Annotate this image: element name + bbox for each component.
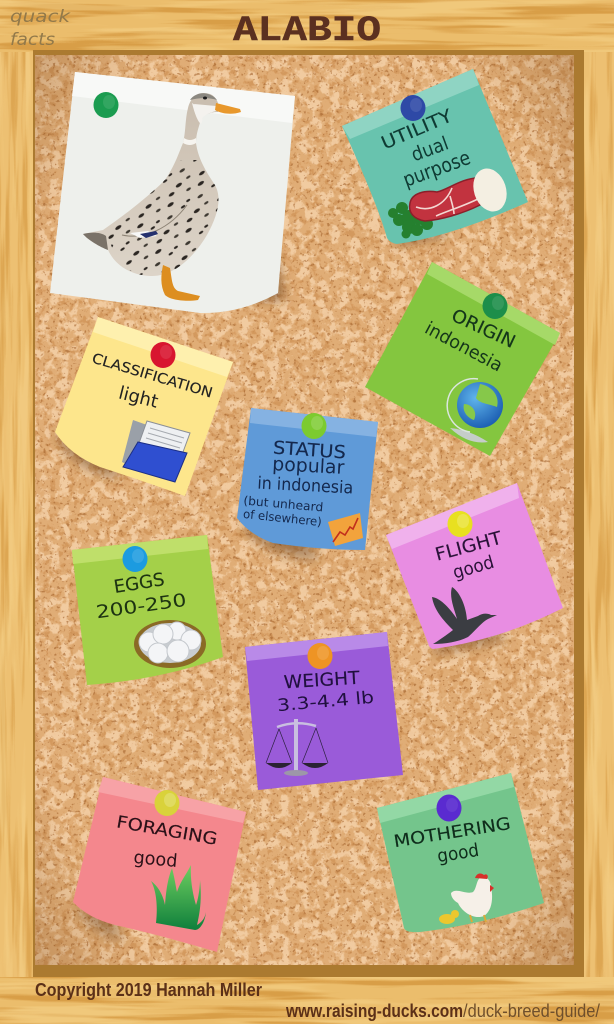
icon: hen and chick	[439, 873, 494, 924]
text: good: good	[436, 840, 481, 867]
text: flight: FLIGHT	[433, 527, 505, 566]
icon: meat, egg and parsley	[388, 164, 512, 238]
panel: eggs note	[72, 535, 223, 685]
panel: status note	[237, 408, 378, 560]
icon: globe	[447, 379, 503, 442]
pin: orange	[308, 643, 332, 669]
quack facts label: quack	[10, 7, 71, 27]
text: in indonesia: in indonesia	[257, 474, 354, 499]
text: good: good	[450, 552, 497, 584]
text: 200-250: 200-250	[95, 590, 188, 623]
panel: flight note	[386, 483, 563, 655]
pin: yellow	[154, 790, 180, 816]
pin: lime	[302, 413, 326, 439]
panel: mothering note	[377, 773, 544, 932]
text: of elsewhere: of elsewhere)	[242, 507, 322, 529]
pin: purple	[436, 794, 462, 822]
pin: red	[150, 342, 176, 368]
panel: weight note	[245, 632, 403, 790]
copyright: Copyright 2019 Hannah Miller	[35, 980, 262, 1000]
website url: /duck-breed-guide/	[463, 1001, 600, 1021]
text: popular: popular	[272, 453, 345, 479]
text: status: STATUS	[272, 437, 347, 464]
text: but unheard: (but unheard	[243, 494, 324, 514]
quack facts label	[10, 7, 71, 50]
panel: foraging note	[73, 777, 246, 952]
website url: www.raising-ducks.com	[285, 1001, 463, 1021]
icon: nest of eggs	[134, 620, 206, 668]
icon: balance scales	[266, 719, 328, 776]
panel: utility note	[342, 69, 528, 245]
text: purpose: purpose	[400, 145, 474, 192]
icon: flying duck	[432, 587, 497, 644]
text: dual: dual	[408, 133, 452, 166]
website url	[285, 1001, 600, 1021]
icon: grass	[151, 865, 206, 930]
text: weight range: 3.3-4.4 lb	[276, 688, 375, 716]
pin: blue	[400, 95, 426, 121]
pin: dark green	[482, 293, 508, 319]
icon: chart	[328, 513, 363, 546]
panel: origin note	[365, 262, 560, 456]
text: weight: WEIGHT	[283, 668, 361, 693]
title: ALABIO	[233, 11, 381, 51]
text: utility: UTILITY	[378, 105, 457, 154]
pin: yellow	[448, 511, 472, 537]
text: mothering: MOTHERING	[392, 814, 512, 852]
text: indonesia: indonesia	[421, 318, 506, 376]
text: good: good	[133, 847, 178, 872]
text: classification: CLASSIFICATION	[90, 351, 214, 402]
pin: green	[94, 92, 118, 118]
pin: azure	[122, 546, 148, 572]
cork board	[35, 55, 574, 965]
illustration: Alabio duck	[83, 93, 241, 301]
text: origin: ORIGIN	[448, 305, 519, 353]
panel: duck photo note	[50, 72, 295, 313]
text: foraging: FORAGING	[115, 812, 219, 850]
text: eggs: EGGS	[112, 569, 166, 598]
text: light: light	[116, 383, 160, 413]
panel: classification note	[55, 317, 233, 496]
quack facts label: facts	[10, 30, 55, 50]
icon: folder	[122, 420, 190, 482]
